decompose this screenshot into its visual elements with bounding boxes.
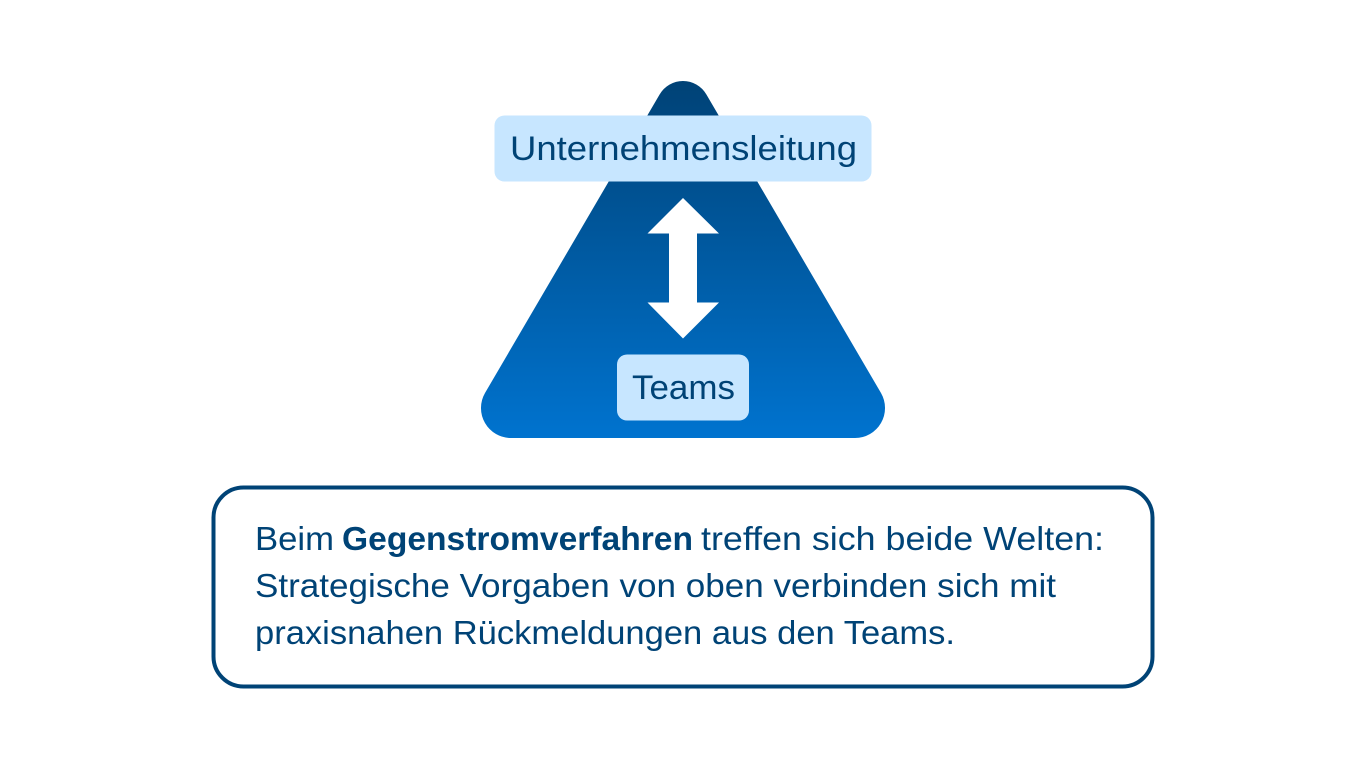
- callout text: Strategische Vorgaben von oben verbinden sich mit: [255, 568, 1057, 605]
- triangle: [481, 81, 885, 438]
- callout text: [255, 521, 1104, 652]
- label: Teams: [617, 354, 749, 420]
- callout text: Beim: [255, 521, 334, 558]
- callout: Gegenstromverfahren: [214, 488, 1152, 686]
- icon: double arrow: [648, 198, 719, 338]
- label: Unternehmensleitung: Unternehmensleitung: [510, 130, 857, 168]
- callout frame: [214, 488, 1152, 686]
- label: Teams: Teams: [632, 369, 735, 407]
- callout text: Gegenstromverfahren: [342, 521, 693, 558]
- label: Unternehmensleitung: [494, 116, 872, 182]
- pyramid diagram: [481, 81, 885, 438]
- callout text: treffen sich beide Welten:: [701, 521, 1104, 558]
- callout text: praxisnahen Rückmeldungen aus den Teams.: [255, 615, 955, 652]
